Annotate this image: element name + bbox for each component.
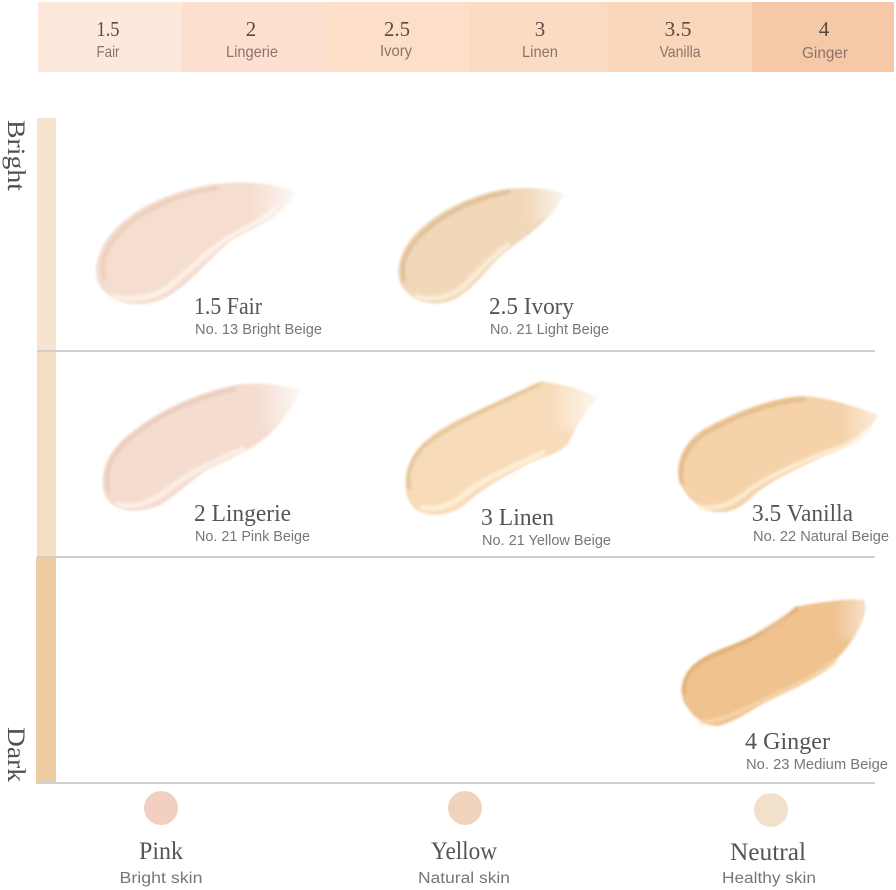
colour dot: neutral <box>754 793 788 827</box>
shade cell: 2.5 Ivory: Ivory <box>380 43 412 60</box>
label: 4 Ginger <box>745 729 888 773</box>
shade scale bar <box>38 2 894 72</box>
shade cell: 3 Linen <box>470 2 607 72</box>
label: 3.5 Vanilla <box>752 501 889 545</box>
shade cell: 1.5 Fair <box>38 2 181 72</box>
label: 2 Lingerie: 2 Lingerie <box>194 501 291 527</box>
label: 3 Linen <box>481 505 611 549</box>
shade cell: 2.5 Ivory: 2.5 <box>384 17 410 41</box>
label: 2 Lingerie: No. 21 Pink Beige <box>195 529 310 545</box>
shade cell: 1.5 Fair: 1.5 <box>96 17 120 41</box>
undertone column: Neutral <box>722 793 816 887</box>
shade cell: 2.5 Ivory <box>326 2 470 72</box>
label: 3.5 Vanilla: 3.5 Vanilla <box>752 501 853 527</box>
label: 4 Ginger: No. 23 Medium Beige <box>746 757 888 773</box>
undertone column: Yellow: Yellow <box>431 838 497 865</box>
label: 3.5 Vanilla: No. 22 Natural Beige <box>753 529 889 545</box>
shade cell: 1.5 Fair: Fair <box>96 44 120 61</box>
label: 3 Linen: No. 21 Yellow Beige <box>482 533 611 549</box>
colour dot: pink <box>144 791 178 825</box>
shade cell: 2 Lingerie: Lingerie <box>226 44 278 61</box>
undertone column: Pink: Bright skin <box>120 870 202 887</box>
label: 4 Ginger: 4 Ginger <box>745 729 830 755</box>
undertone column: Pink <box>120 791 202 887</box>
undertone column: Yellow: Natural skin <box>418 870 510 887</box>
swatch: 1.5 Fair <box>96 176 306 304</box>
swatch: 2.5 Ivory <box>398 180 575 303</box>
label: 1.5 Fair <box>194 294 322 338</box>
brightness axis bar <box>36 118 56 784</box>
undertone column: Neutral: Neutral <box>730 839 806 866</box>
shade cell: 3.5 Vanilla: Vanilla <box>660 44 701 61</box>
undertone column: Yellow <box>418 791 510 887</box>
undertone column: Neutral: Healthy skin <box>722 870 816 887</box>
swatch: 3.5 Vanilla <box>678 396 886 512</box>
axis label: Dark: Dark <box>2 727 29 783</box>
shade cell: 4 Ginger <box>752 2 894 72</box>
swatch: 4 Ginger <box>682 594 868 726</box>
shade cell: 3 Linen: 3 <box>535 17 545 41</box>
shade cell: 3 Linen: Linen <box>522 44 558 61</box>
shade cell: 3.5 Vanilla <box>607 2 752 72</box>
label: 2.5 Ivory: 2.5 Ivory <box>489 294 574 320</box>
shade cell: 2 Lingerie <box>181 2 326 72</box>
label: 3 Linen: 3 Linen <box>481 505 554 531</box>
swatch: 3 Linen <box>406 378 608 515</box>
label: 2.5 Ivory <box>489 294 609 338</box>
shade cell: 4 Ginger: 4 <box>819 17 830 41</box>
row divider lines <box>37 350 875 784</box>
label: 2 Lingerie <box>194 501 310 545</box>
undertone column: Pink: Pink <box>139 838 183 865</box>
shade cell: 4 Ginger: Ginger <box>802 45 849 62</box>
swatch: 2 Lingerie <box>103 376 310 511</box>
label: 1.5 Fair: 1.5 Fair <box>194 294 262 320</box>
shade cell: 3.5 Vanilla: 3.5 <box>664 17 692 41</box>
shade cell: 2 Lingerie: 2 <box>246 17 256 41</box>
colour dot: yellow <box>448 791 482 825</box>
label: 2.5 Ivory: No. 21 Light Beige <box>490 322 609 338</box>
label: 1.5 Fair: No. 13 Bright Beige <box>195 322 322 338</box>
axis label: Bright: Bright <box>2 120 29 191</box>
